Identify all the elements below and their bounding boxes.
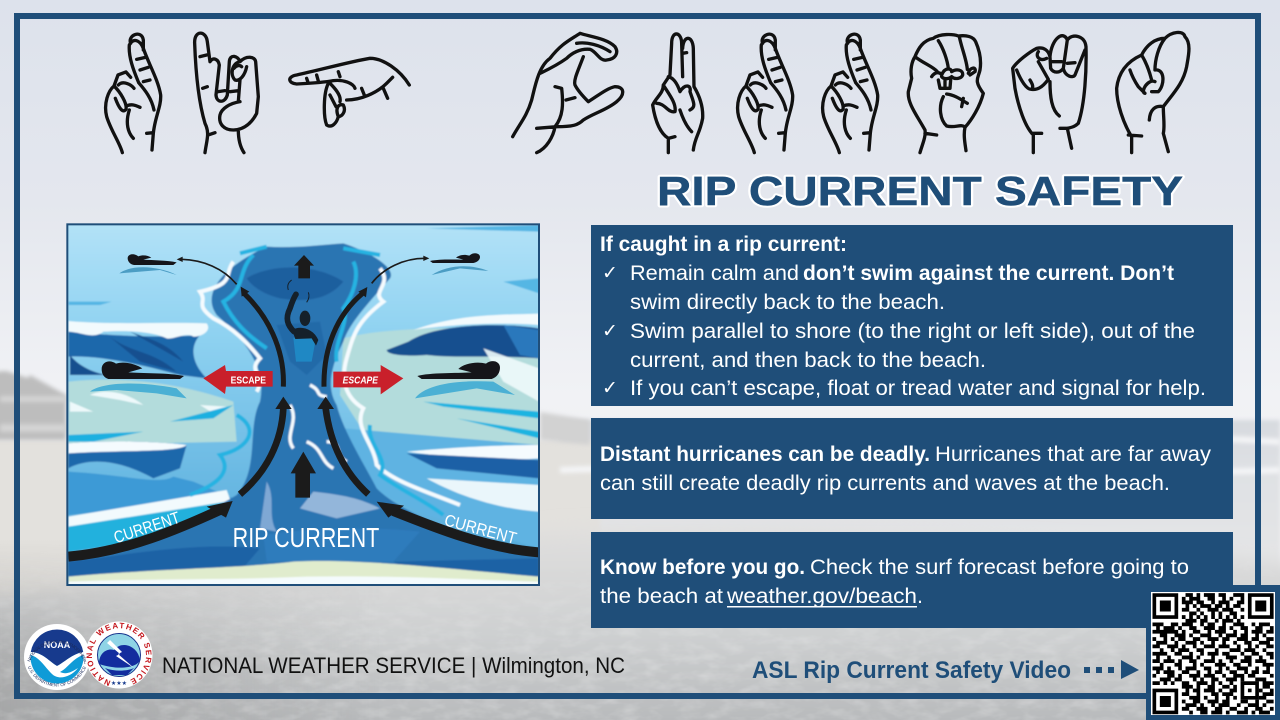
swimmer: upper left: [119, 254, 177, 275]
sign letter I: [195, 33, 258, 153]
sign letter U: [653, 34, 703, 153]
red escape arrow left: ESCAPE: [231, 376, 266, 387]
QR code: [1146, 585, 1280, 720]
background: beach photo: [0, 322, 1280, 720]
NOAA logo: NATIONAL OCEANIC AND ATMOSPHERIC ADMINISTRATION: [27, 640, 87, 664]
NOAA logo: U.S. DEPARTMENT OF COMMERCE: [28, 666, 86, 686]
check list: swim directly back to the beach.: [630, 290, 945, 314]
ASL hand signs: CURRENT, part two: [823, 32, 1189, 153]
check list: [602, 261, 1206, 400]
swimmer: left large: [90, 361, 187, 398]
panel: know before you go: the beach at: [600, 584, 723, 608]
rip current label: RIP CURRENT: [233, 522, 380, 553]
NOAA logo: NOAA: [44, 640, 71, 650]
title: RIP CURRENT SAFETY: [657, 168, 1183, 214]
panel: distant hurricanes: Hurricanes that are far away: [935, 442, 1211, 466]
panel: distant hurricanes: can still create deadly rip currents and waves at the beach.: [600, 471, 1170, 495]
check list: ✓: [602, 320, 618, 342]
check list: ✓: [602, 262, 618, 284]
check list: don’t swim against the current. Don’t: [803, 261, 1174, 285]
panel: know before you go: .: [917, 584, 923, 608]
check list: If you can’t escape, float or tread water and signal for help.: [630, 376, 1206, 400]
current label left: CURRENT: [111, 508, 182, 547]
sign letter R: [738, 34, 793, 153]
panel heading: If caught in a rip current:: [600, 232, 847, 256]
swimmer: right large: [415, 361, 515, 398]
check list: ✓: [602, 377, 618, 399]
red escape arrow left: [203, 365, 273, 394]
title: RIP CURRENT SAFETY: [657, 168, 1183, 214]
sign letter P: [290, 58, 409, 126]
swimmer: in rip current: [287, 280, 318, 362]
footer: video label: ASL Rip Current Safety Video: [752, 657, 1071, 684]
sign letter T: [1117, 32, 1189, 153]
panel: know before you go: weather.gov/beach: [726, 584, 917, 608]
sign letter C: [513, 33, 623, 153]
check list: Swim parallel to shore (to the right or left side), out of the: [630, 319, 1195, 343]
current label right: CURRENT: [442, 511, 519, 548]
panel: distant hurricanes: [591, 418, 1233, 519]
ASL hand signs: CURRENT, part one: [513, 33, 793, 153]
swimmer: upper right: [430, 253, 488, 275]
National Weather Service logo: ★★★: [111, 680, 127, 687]
footer: office name: NATIONAL WEATHER SERVICE | Wilmington, NC: [162, 653, 625, 678]
red escape arrow right: ESCAPE: [343, 376, 378, 387]
sign letter R: [823, 34, 878, 153]
sign letter R: [106, 34, 161, 153]
panel: distant hurricanes: Distant hurricanes can be deadly.: [600, 442, 930, 466]
panel: if caught in a rip current: [591, 225, 1233, 406]
arrow to QR code: [1084, 660, 1139, 679]
check list: current, and then back to the beach.: [630, 348, 986, 372]
sign letter E: [908, 35, 983, 153]
panel: know before you go: Know before you go.: [600, 555, 805, 579]
panel: know before you go: [591, 532, 1233, 628]
sign letter N: [1013, 36, 1086, 153]
check list: Remain calm and: [630, 261, 799, 285]
NOAA logo: [24, 624, 88, 690]
panel: know before you go: Check the surf forecast before going to: [810, 555, 1189, 579]
ASL hand signs: RIP: [106, 33, 409, 153]
National Weather Service logo: NATIONAL WEATHER SERVICE: [86, 622, 152, 686]
black current arrows: [68, 258, 539, 557]
rip current diagram: [67, 224, 539, 585]
red escape arrow right: [333, 365, 403, 394]
